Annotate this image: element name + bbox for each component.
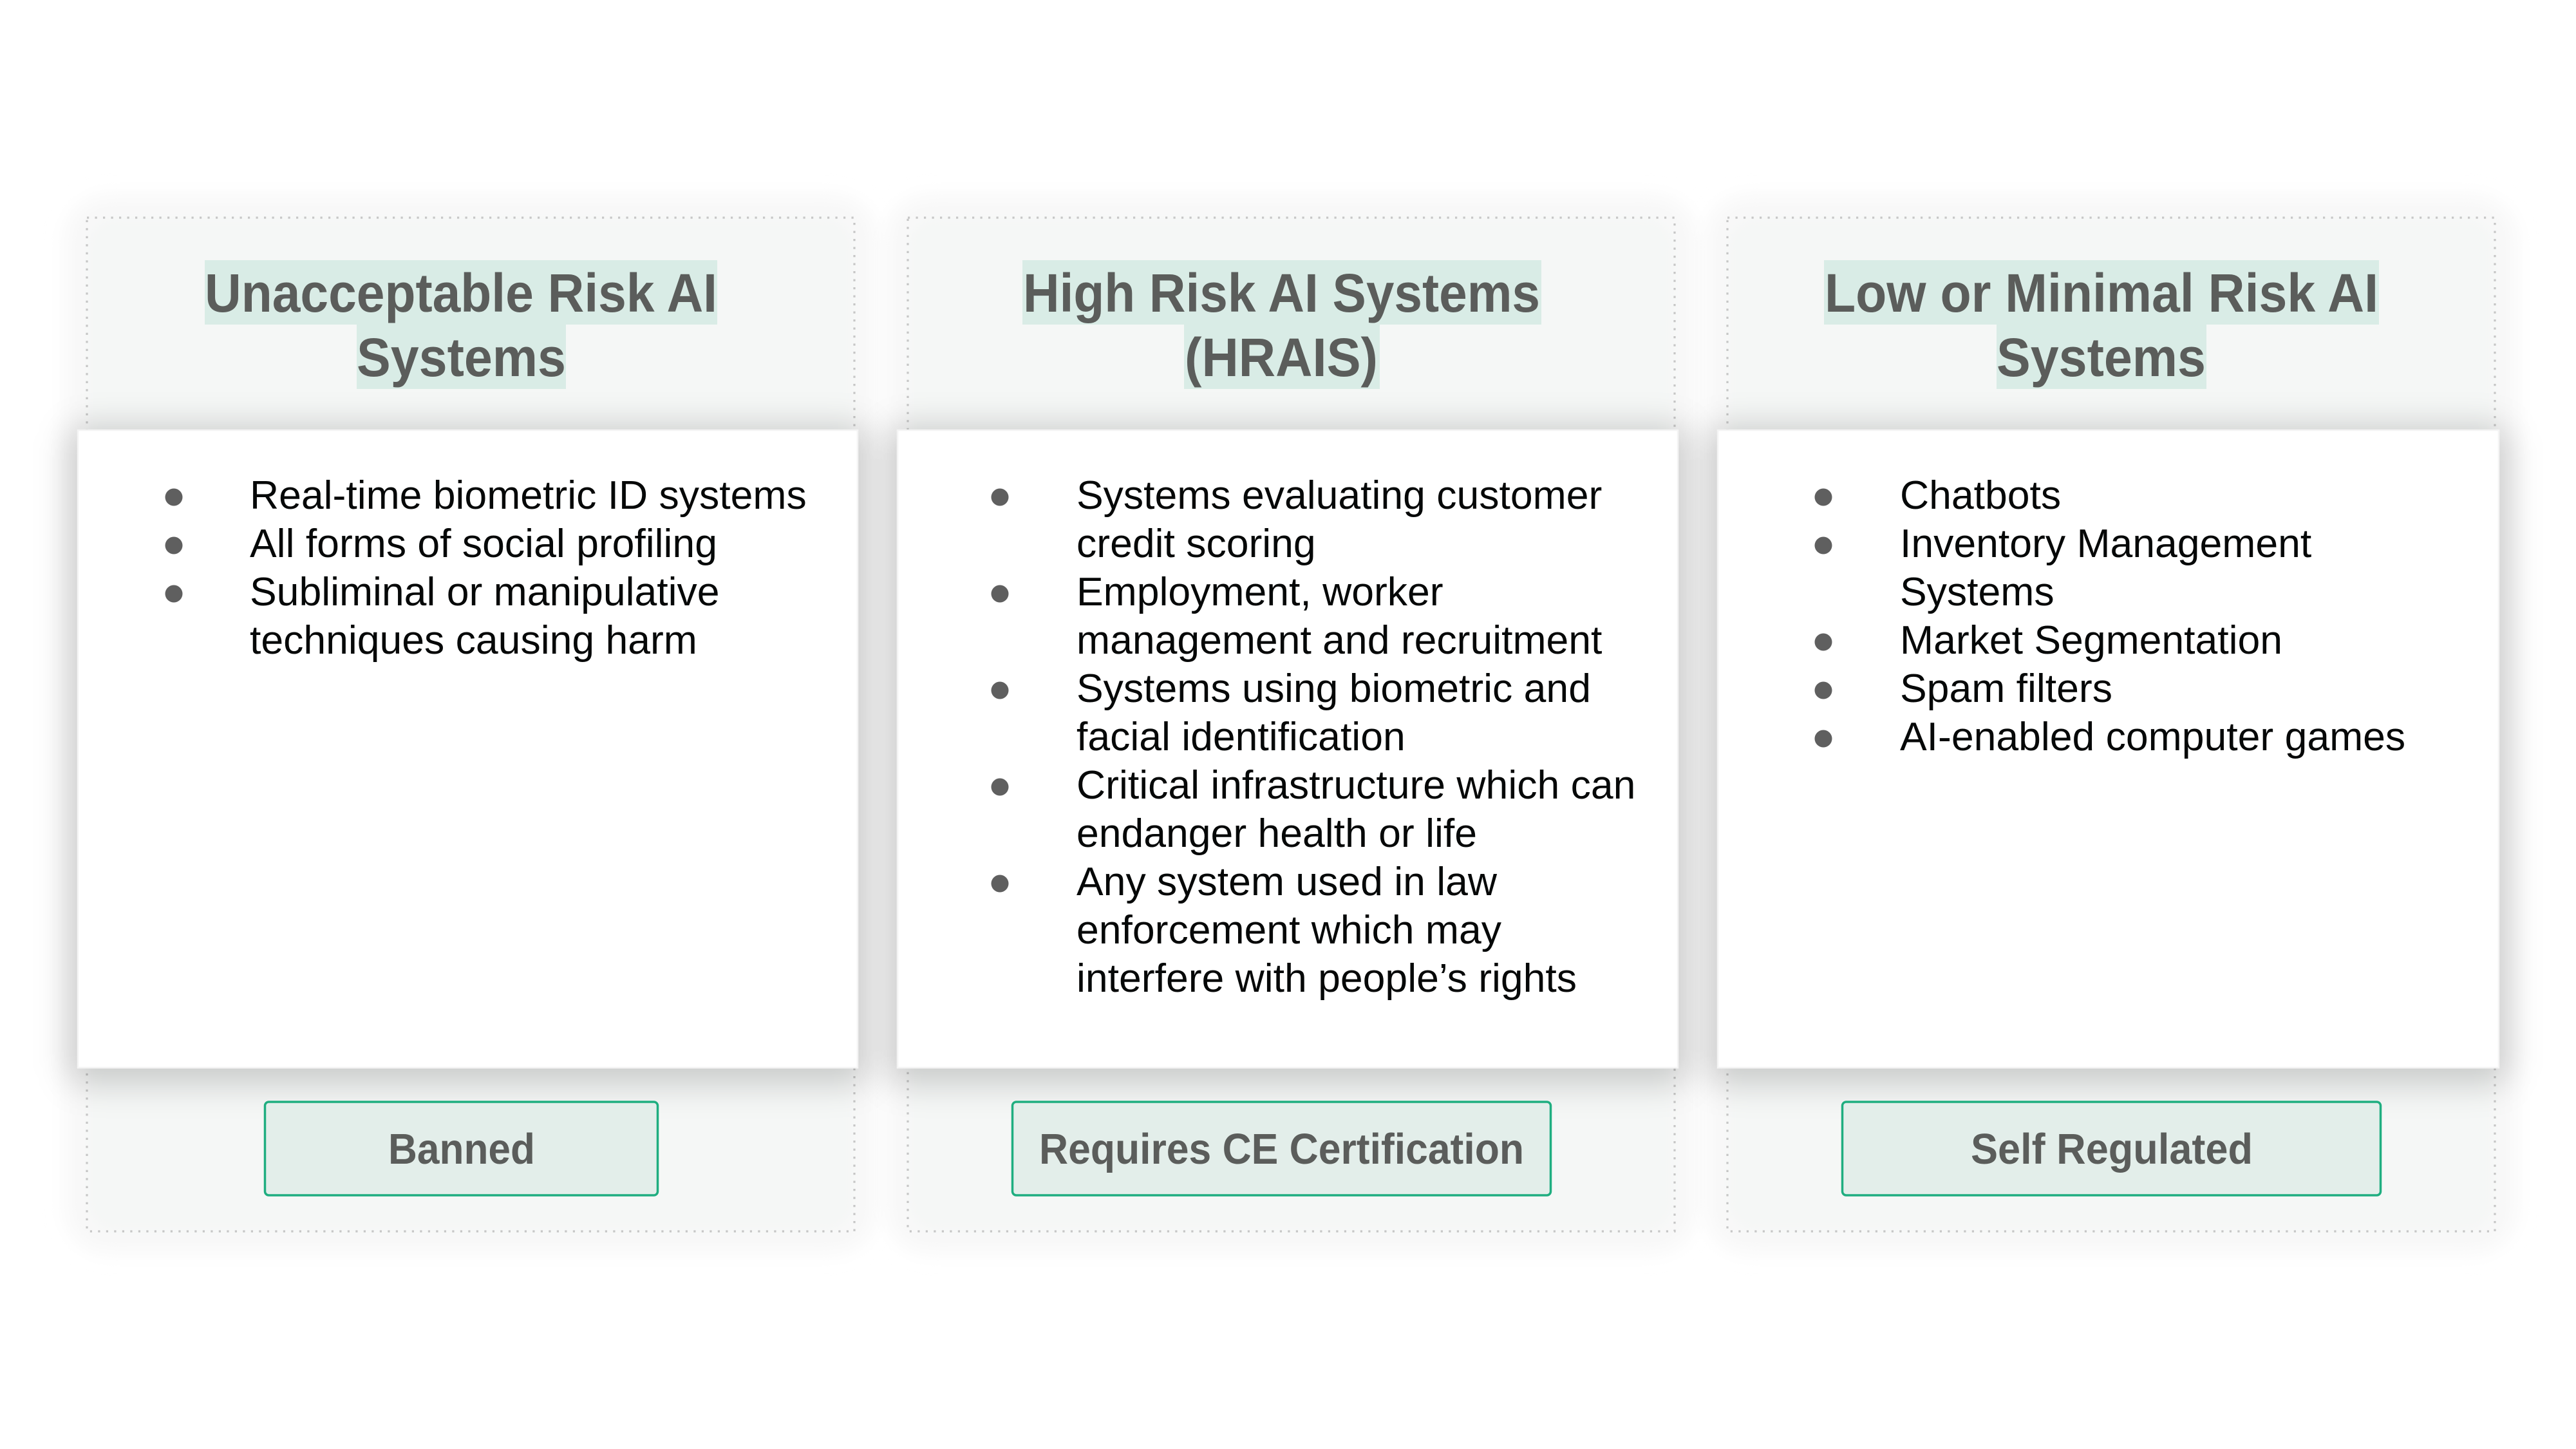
heading: Unacceptable Risk AI Systems (205, 260, 717, 389)
card: high risk list (898, 430, 1678, 1068)
list text: Market Segmentation (1900, 618, 2282, 663)
heading: Unacceptable Risk AI Systems: Systems (357, 327, 566, 388)
bullets (165, 488, 183, 603)
badge: Requires CE Certification: Requires CE Certification (1039, 1125, 1524, 1173)
list text (1076, 473, 1635, 1001)
list text: Chatbots (1900, 473, 2061, 518)
heading: Low or Minimal Risk AI Systems: Systems (1997, 327, 2206, 388)
bullets (1814, 488, 1832, 747)
list text: All forms of social profiling (250, 521, 717, 566)
list text: Inventory Management (1900, 521, 2311, 566)
list text (250, 473, 807, 663)
list text: Systems evaluating customer (1076, 473, 1602, 518)
list text: Employment, worker (1076, 569, 1443, 614)
list text: Any system used in law (1076, 859, 1498, 904)
card: unacceptable risk list (78, 430, 858, 1068)
list text: management and recruitment (1076, 618, 1602, 663)
list text: enforcement which may (1076, 907, 1502, 952)
card: low risk list (1718, 430, 2499, 1068)
list text: Spam filters (1900, 666, 2112, 711)
list text: endanger health or life (1076, 811, 1477, 856)
bullets (992, 488, 1008, 893)
heading: Low or Minimal Risk AI Systems (1824, 260, 2379, 389)
badge: Self Regulated: Self Regulated (1971, 1125, 2253, 1173)
panel: low risk background (1705, 195, 2517, 1254)
list text: credit scoring (1076, 521, 1316, 566)
list text: Systems (1900, 569, 2054, 614)
list text: Real-time biometric ID systems (250, 473, 807, 518)
list text: interfere with people’s rights (1076, 956, 1577, 1001)
list text: facial identification (1076, 714, 1406, 759)
badge: Requires CE Certification (1012, 1102, 1550, 1195)
list text: Subliminal or manipulative (250, 569, 720, 614)
panel: high risk background (885, 195, 1697, 1254)
heading: Low or Minimal Risk AI Systems: Low or Minimal Risk AI (1825, 263, 2378, 323)
badge: Banned (265, 1102, 658, 1195)
badge: Self Regulated (1843, 1102, 2381, 1195)
heading: Unacceptable Risk AI Systems: Unacceptable Risk AI (205, 263, 717, 323)
card shadows (67, 425, 2509, 1085)
list text (1900, 473, 2405, 759)
panel: unacceptable risk background (64, 195, 877, 1254)
list text: AI-enabled computer games (1900, 714, 2405, 759)
list text: Critical infrastructure which can (1076, 762, 1635, 808)
heading: High Risk AI Systems (HRAIS) (1022, 260, 1541, 389)
heading: High Risk AI Systems (HRAIS): High Risk AI Systems (1023, 263, 1540, 323)
heading: High Risk AI Systems (HRAIS): (HRAIS) (1185, 327, 1378, 388)
badge: Banned: Banned (388, 1125, 535, 1173)
list text: techniques causing harm (250, 618, 697, 663)
list text: Systems using biometric and (1076, 666, 1591, 711)
